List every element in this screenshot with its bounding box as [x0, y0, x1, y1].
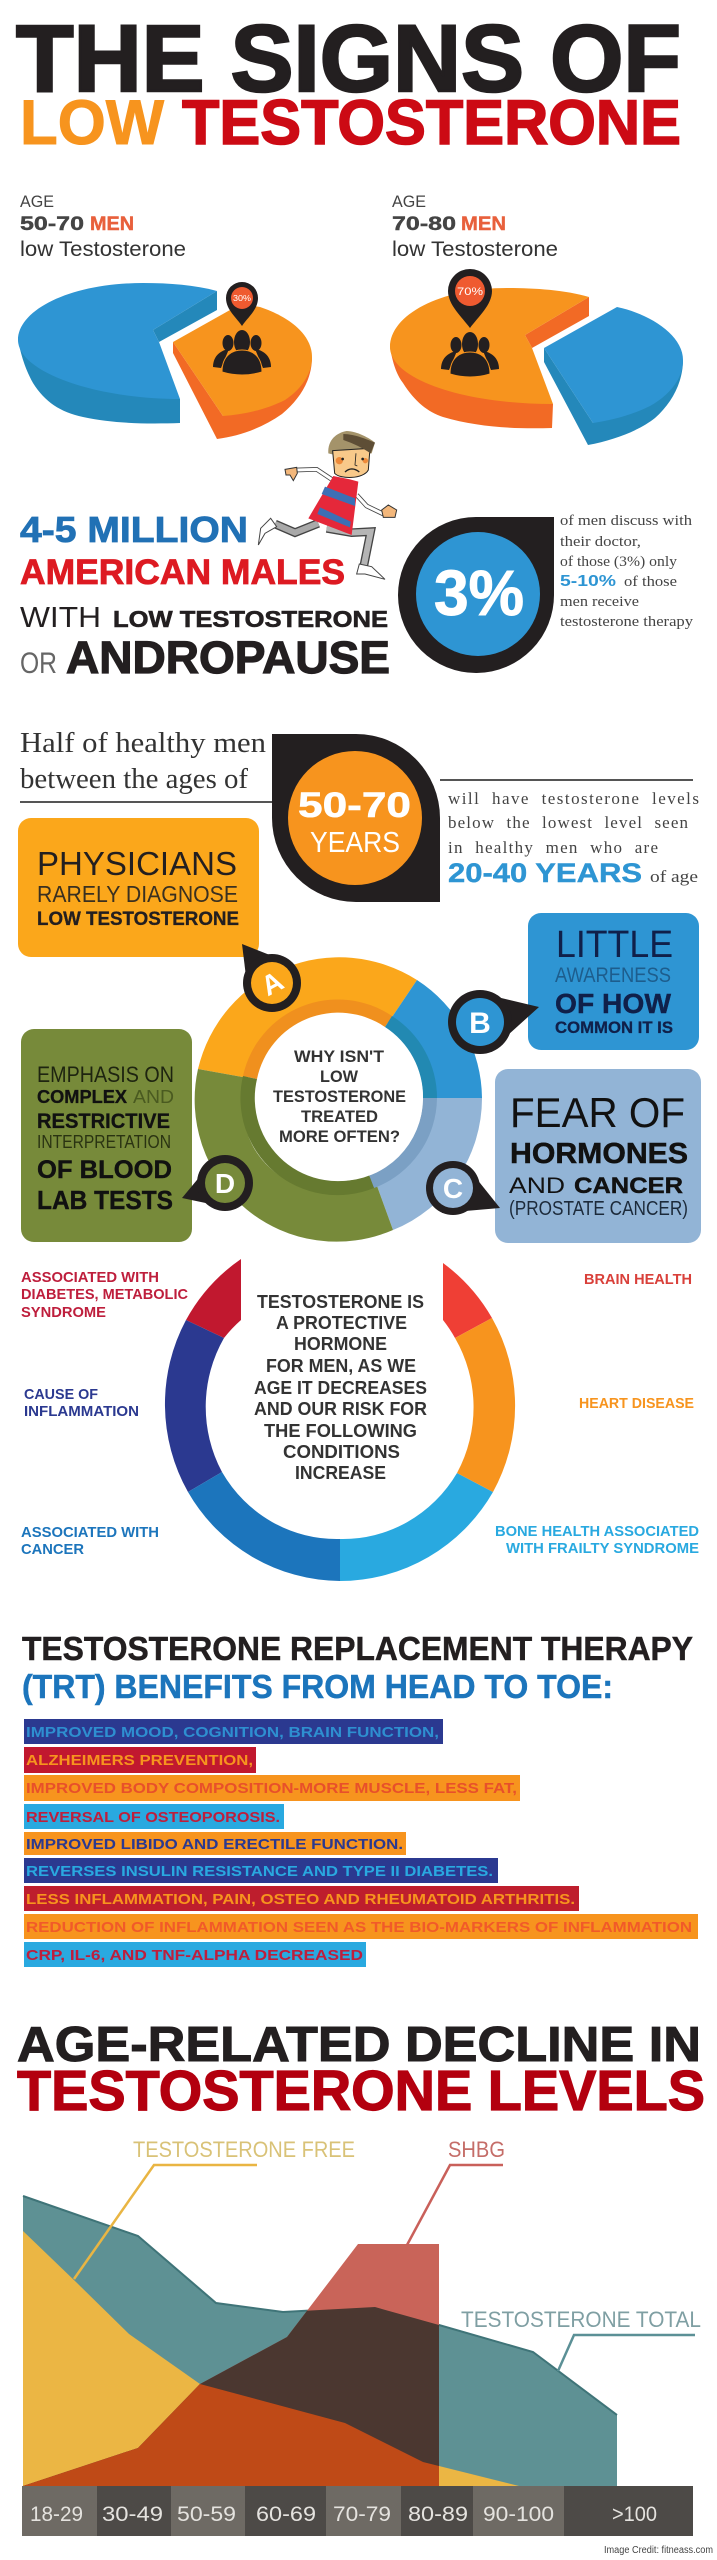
- label: diabetes: SYNDROME: [21, 1304, 106, 1321]
- label: associated with cancer: ASSOCIATED WITH: [21, 1524, 159, 1541]
- callout: 50-70 years drop: 50-70: [298, 786, 411, 825]
- callout: 50-70 years drop: [272, 734, 440, 902]
- list: TRT benefits: REDUCTION OF INFLAMMATION SEEN AS THE BIO-MARKERS OF INFLAMMATION: [26, 1919, 692, 1936]
- icon: map pin 70%: 70%: [457, 286, 483, 298]
- panel: little awareness: COMMON IT IS: [555, 1018, 673, 1037]
- list: TRT benefits: REVERSES INSULIN RESISTANCE AND TYPE II DIABETES.: [26, 1863, 493, 1880]
- panel: physicians: RARELY DIAGNOSE: [37, 881, 238, 907]
- text: testosterone is a protective hormone: FOR MEN, AS WE: [266, 1356, 416, 1376]
- label: SHBG: [407, 2137, 505, 2245]
- text: 3% detail: of men discuss with: [560, 513, 693, 529]
- list: TRT benefits: IMPROVED BODY COMPOSITION-MORE MUSCLE, LESS FAT,: [26, 1780, 517, 1797]
- heading: TRT benefits: (TRT) BENEFITS FROM HEAD TO TOE:: [22, 1668, 613, 1705]
- text: 3% detail: of those (3%) only: [560, 554, 678, 570]
- headline: 4-5 million American males: 4-5 MILLION: [20, 509, 248, 550]
- icon: pin D: D: [215, 1168, 235, 1199]
- text: 3% detail: their doctor,: [560, 534, 641, 550]
- text: ring question: MORE OFTEN?: [279, 1127, 400, 1146]
- label: associated with cancer: CANCER: [21, 1541, 84, 1558]
- panel: emphasis on complex: COMPLEX: [37, 1087, 127, 1107]
- label: diabetes: [21, 1269, 188, 1321]
- list: TRT benefits: LESS INFLAMMATION, PAIN, OSTEO AND RHEUMATOID ARTHRITIS.: [26, 1891, 575, 1908]
- label: bone health: WITH FRAILTY SYNDROME: [506, 1540, 699, 1557]
- title: LOW: [20, 88, 165, 158]
- panel: emphasis on complex: RESTRICTIVE: [37, 1110, 170, 1133]
- list: TRT benefits: IMPROVED LIBIDO AND ERECTILE FUNCTION.: [26, 1836, 403, 1853]
- text: ring question: LOW: [320, 1067, 359, 1086]
- icon: pin B: B: [469, 1007, 491, 1040]
- text: testosterone is a protective hormone: TESTOSTERONE IS: [257, 1292, 424, 1312]
- icon: pin A: A: [256, 965, 288, 1002]
- age 50-70 label: MEN: [90, 214, 134, 235]
- label: cause of inflammation: [24, 1386, 139, 1420]
- panel: fear of hormones: [495, 1069, 701, 1243]
- panel: emphasis on complex: LAB TESTS: [37, 1185, 173, 1215]
- panel: physicians: [18, 818, 259, 957]
- panel: emphasis on complex: INTERPRETATION: [37, 1132, 171, 1152]
- label: bone health: [495, 1523, 699, 1557]
- label: cause of inflammation: INFLAMMATION: [24, 1403, 139, 1420]
- icon: people group: [441, 332, 499, 377]
- label: testosterone total: [461, 2307, 701, 2371]
- panel: little awareness: LITTLE: [556, 924, 673, 966]
- chart axis: age bands: >100: [612, 2503, 657, 2526]
- callout: 3% drop: [398, 517, 554, 673]
- panel: little awareness: [528, 913, 699, 1050]
- icon: people group: [213, 330, 271, 375]
- text: ring question: [273, 1047, 406, 1146]
- icon: map pin 30%: [226, 282, 258, 326]
- text: 3% detail: [560, 513, 694, 630]
- text: ring question: TESTOSTERONE: [273, 1087, 406, 1106]
- text: 3% detail: men receive: [560, 594, 639, 610]
- text: half of healthy men: [20, 727, 267, 795]
- text: testosterone is a protective hormone: A PROTECTIVE: [276, 1313, 407, 1333]
- age 50-70 label: [20, 192, 186, 261]
- text: testosterone is a protective hormone: AND OUR RISK FOR: [254, 1399, 427, 1419]
- icon: pin C: [426, 1161, 500, 1215]
- headline: 4-5 million American males: LOW TESTOSTERONE: [113, 606, 388, 632]
- pie chart: 30%: [18, 282, 312, 439]
- list: TRT benefits: REVERSAL OF OSTEOPOROSIS.: [26, 1809, 280, 1826]
- icon: pin C: C: [443, 1173, 463, 1204]
- chart: testosterone area chart: [23, 2137, 701, 2486]
- title: [16, 6, 681, 158]
- text: testosterone is a protective hormone: INCREASE: [295, 1463, 386, 1483]
- pie chart: 70%: [390, 269, 683, 445]
- text: testosterone is a protective hormone: HORMONE: [294, 1334, 387, 1354]
- headline: 4-5 million American males: AMERICAN MALES: [20, 553, 345, 592]
- headline: 4-5 million American males: WITH: [20, 602, 101, 634]
- panel: emphasis on complex: AND: [133, 1087, 174, 1107]
- callout: 50-70 years drop: YEARS: [310, 827, 400, 859]
- age 70-80 label: low Testosterone: [392, 238, 558, 261]
- title: THE SIGNS OF: [16, 6, 681, 112]
- heading: TRT benefits: [22, 1630, 693, 1705]
- icon: pin B: [448, 990, 539, 1054]
- label: diabetes: ASSOCIATED WITH: [21, 1269, 159, 1286]
- text: 3% detail: testosterone therapy: [560, 614, 694, 630]
- age 50-70 label: 50-70: [20, 214, 84, 235]
- label: heart disease: HEART DISEASE: [579, 1395, 694, 1412]
- icon: pin A: [242, 944, 301, 1012]
- icon: pin D: [182, 1155, 253, 1211]
- label: diabetes: DIABETES, METABOLIC: [21, 1286, 188, 1303]
- age 70-80 label: [392, 192, 558, 261]
- panel: fear of hormones: FEAR OF: [510, 1089, 685, 1136]
- heading: TRT benefits: TESTOSTERONE REPLACEMENT THERAPY: [22, 1630, 693, 1667]
- chart axis: age bands: 30-49: [102, 2503, 163, 2526]
- label: testosterone free: TESTOSTERONE FREE: [133, 2137, 355, 2162]
- panel: fear of hormones: AND: [509, 1173, 565, 1198]
- heading: age-related decline: TESTOSTERONE LEVELS: [17, 2059, 705, 2123]
- label: testosterone free: [74, 2137, 355, 2279]
- text: will have testosterone levels: will have testosterone levels: [448, 789, 699, 808]
- list: TRT benefits: ALZHEIMERS PREVENTION,: [26, 1752, 253, 1769]
- callout: 3% drop: 3%: [434, 557, 524, 629]
- heading: age-related decline: AGE-RELATED DECLINE IN: [17, 2018, 701, 2072]
- icon: map pin 70%: [448, 269, 492, 328]
- label: associated with cancer: [21, 1524, 159, 1558]
- text: testosterone is a protective hormone: THE FOLLOWING: [264, 1421, 417, 1441]
- age 70-80 label: MEN: [461, 214, 506, 235]
- text: will have testosterone levels: 20-40 YEARS: [448, 858, 642, 888]
- text: half of healthy men: Half of healthy men: [20, 727, 267, 759]
- chart axis: age bands: 80-89: [408, 2503, 468, 2526]
- chart axis: age bands: 60-69: [256, 2503, 316, 2526]
- text: will have testosterone levels: [448, 789, 699, 888]
- age 50-70 label: low Testosterone: [20, 238, 186, 261]
- panel: emphasis on complex: [21, 1029, 192, 1242]
- list: TRT benefits: [24, 1719, 698, 1967]
- panel: little awareness: OF HOW: [555, 988, 672, 1019]
- text: 3% detail: of those: [624, 574, 677, 590]
- headline: 4-5 million American males: OR: [20, 647, 57, 680]
- label: cause of inflammation: CAUSE OF: [24, 1386, 98, 1403]
- chart axis: age bands: 90-100: [483, 2503, 554, 2526]
- text: will have testosterone levels: of age: [650, 867, 698, 886]
- chart axis: age bands: 18-29: [30, 2503, 83, 2526]
- headline: 4-5 million American males: [20, 509, 390, 683]
- panel: physicians: PHYSICIANS: [37, 845, 237, 882]
- text: testosterone is a protective hormone: AGE IT DECREASES: [254, 1378, 427, 1398]
- label: SHBG: SHBG: [448, 2137, 505, 2162]
- text: testosterone is a protective hormone: [254, 1292, 427, 1483]
- panel: little awareness: AWARENESS: [555, 964, 671, 987]
- chart: conditions ring: [165, 1259, 515, 1581]
- panel: emphasis on complex: EMPHASIS ON: [37, 1062, 174, 1087]
- icon: map pin 30%: 30%: [233, 294, 251, 303]
- heading: age-related decline: [17, 2018, 705, 2123]
- illustration: running man: [258, 431, 397, 579]
- list: TRT benefits: CRP, IL-6, AND TNF-ALPHA DECREASED: [26, 1947, 363, 1964]
- chart axis: age bands: [22, 2486, 693, 2536]
- age 70-80 label: 70-80: [392, 214, 456, 235]
- text: will have testosterone levels: below the lowest level seen: [448, 813, 688, 832]
- chart axis: age bands: 70-79: [333, 2503, 391, 2526]
- age 50-70 label: AGE: [20, 192, 54, 211]
- text: half of healthy men: between the ages of: [20, 763, 248, 795]
- panel: fear of hormones: HORMONES: [510, 1138, 688, 1170]
- label: testosterone total: TESTOSTERONE TOTAL: [461, 2307, 701, 2332]
- label: brain health: BRAIN HEALTH: [584, 1271, 692, 1288]
- label: bone health: BONE HEALTH ASSOCIATED: [495, 1523, 699, 1540]
- list: TRT benefits: IMPROVED MOOD, COGNITION, BRAIN FUNCTION,: [26, 1724, 439, 1741]
- text: 3% detail: 5-10%: [560, 573, 616, 590]
- panel: fear of hormones: (PROSTATE CANCER): [509, 1198, 688, 1220]
- text: ring question: WHY ISN'T: [294, 1047, 385, 1066]
- chart: why isn't low testosterone treated ring: [195, 957, 482, 1242]
- panel: emphasis on complex: OF BLOOD: [37, 1156, 172, 1184]
- text: will have testosterone levels: in healthy men who are: [448, 838, 658, 857]
- chart axis: age bands: 50-59: [177, 2503, 236, 2526]
- text: testosterone is a protective hormone: CONDITIONS: [283, 1442, 400, 1462]
- panel: fear of hormones: CANCER: [574, 1173, 683, 1198]
- headline: 4-5 million American males: ANDROPAUSE: [66, 632, 390, 683]
- panel: physicians: LOW TESTOSTERONE: [37, 909, 239, 930]
- title: TESTOSTERONE: [182, 88, 681, 158]
- age 70-80 label: AGE: [392, 192, 426, 211]
- text: ring question: TREATED: [301, 1107, 378, 1126]
